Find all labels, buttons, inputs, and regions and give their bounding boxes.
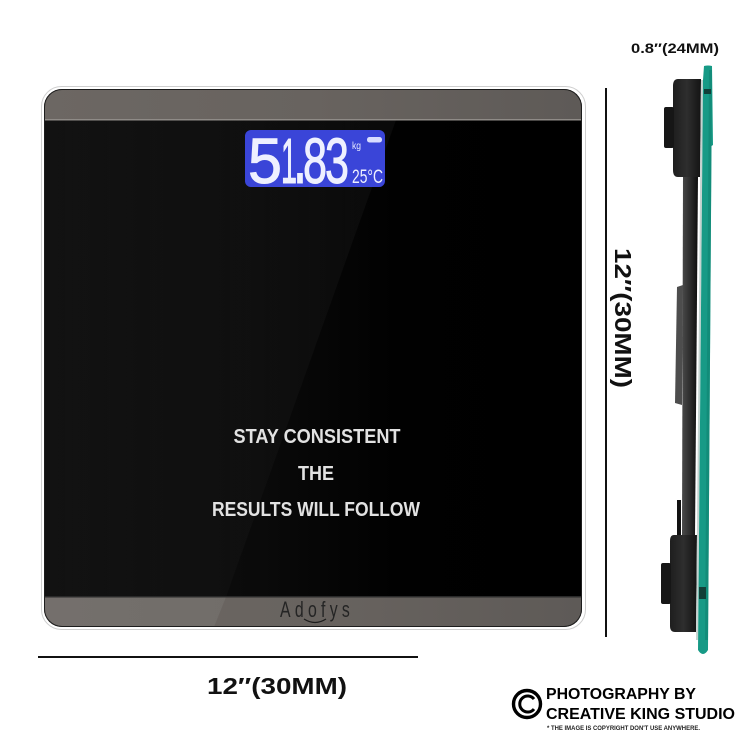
panel: scale front view [42,86,586,630]
weight reading: 1 [281,125,297,197]
brand logo: Adofys [280,599,350,623]
battery indicator [367,137,382,142]
copyright notice: * THE IMAGE IS COPYRIGHT DON'T USE ANYWHERE. [547,726,700,732]
credit block: CREATIVE KING STUDIO [546,706,735,723]
dimension: height label: 12″(30MM) [610,248,636,388]
studio credit: PHOTOGRAPHY BY [546,686,696,703]
unit label: kg [352,141,361,152]
credit block [514,686,735,732]
weight reading: 3 [325,125,349,197]
top band [44,89,582,120]
teal glass edge [698,66,713,654]
dimension: width label: 12″(30MM) [207,673,347,699]
motto text: THE [298,462,334,485]
motto text [212,425,421,521]
panel: scale side view [661,66,713,654]
glass notches [704,89,711,94]
scale outer glass edge [42,86,586,630]
bottom foot knob [661,563,671,604]
weight reading: . [295,125,305,197]
lower nub [677,500,681,535]
glass edge highlight [696,80,703,640]
bottom band [44,597,582,627]
dimension: width line [38,656,418,658]
dimension: height line [605,88,607,637]
centre bump [675,285,683,405]
top foot [673,79,701,177]
LCD display [245,125,385,197]
temperature reading: 25°C [352,167,383,188]
side support frame [682,175,698,536]
top foot knob [664,107,674,148]
copyright icon [514,690,540,718]
scale glass surface [44,89,582,627]
motto text: RESULTS WILL FOLLOW [212,498,421,521]
bottom foot [670,535,697,632]
weight reading: 8 [303,125,327,197]
weight reading: 5 [248,125,282,197]
dimension: depth label: 0.8″(24MM) [631,41,719,56]
motto text: STAY CONSISTENT [234,425,401,448]
weight reading [248,125,349,197]
